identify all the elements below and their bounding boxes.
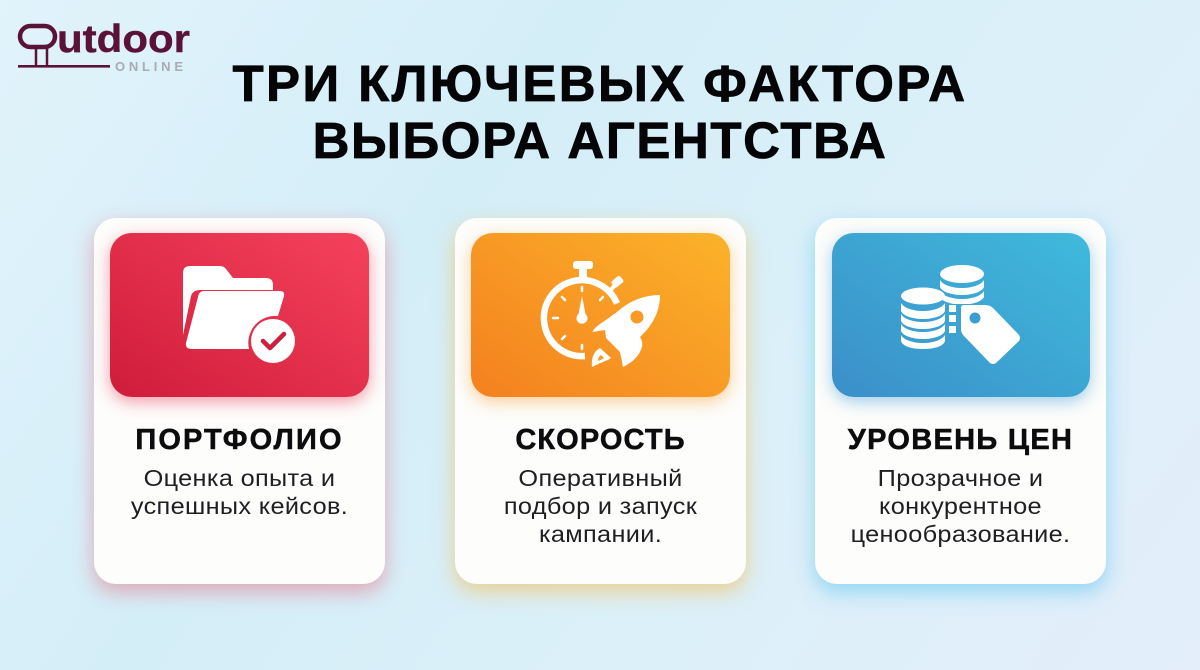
panel: уровень цен xyxy=(815,218,1106,584)
heading: ПОРТФОЛИО xyxy=(135,424,344,456)
icon panel: coins and price tag xyxy=(832,233,1090,397)
description: успешных кейсов. xyxy=(131,492,348,518)
description xyxy=(131,464,348,519)
panel: портфолио xyxy=(94,218,385,584)
description: кампании. xyxy=(539,520,662,546)
description: конкурентное xyxy=(879,492,1042,518)
heading: УРОВЕНЬ ЦЕН xyxy=(848,424,1073,456)
panel: скорость xyxy=(455,218,746,584)
icon panel: folder with check xyxy=(110,233,369,397)
description: подбор и запуск xyxy=(504,492,697,518)
description: Оперативный xyxy=(518,464,683,490)
icon panel: stopwatch and rocket xyxy=(471,233,730,397)
description: Оценка опыта и xyxy=(144,464,335,490)
title line 1: ТРИ КЛЮЧЕВЫХ ФАКТОРА xyxy=(232,54,968,112)
logo: Outdoor Online xyxy=(18,20,190,74)
heading: СКОРОСТЬ xyxy=(515,424,686,456)
description xyxy=(504,464,697,546)
title line 2: ВЫБОРА АГЕНТСТВА xyxy=(313,112,887,168)
description xyxy=(851,464,1070,547)
description: ценообразование. xyxy=(851,520,1070,546)
description: Прозрачное и xyxy=(878,464,1043,490)
logo: Outdoor Online: ONLINE xyxy=(115,59,183,74)
